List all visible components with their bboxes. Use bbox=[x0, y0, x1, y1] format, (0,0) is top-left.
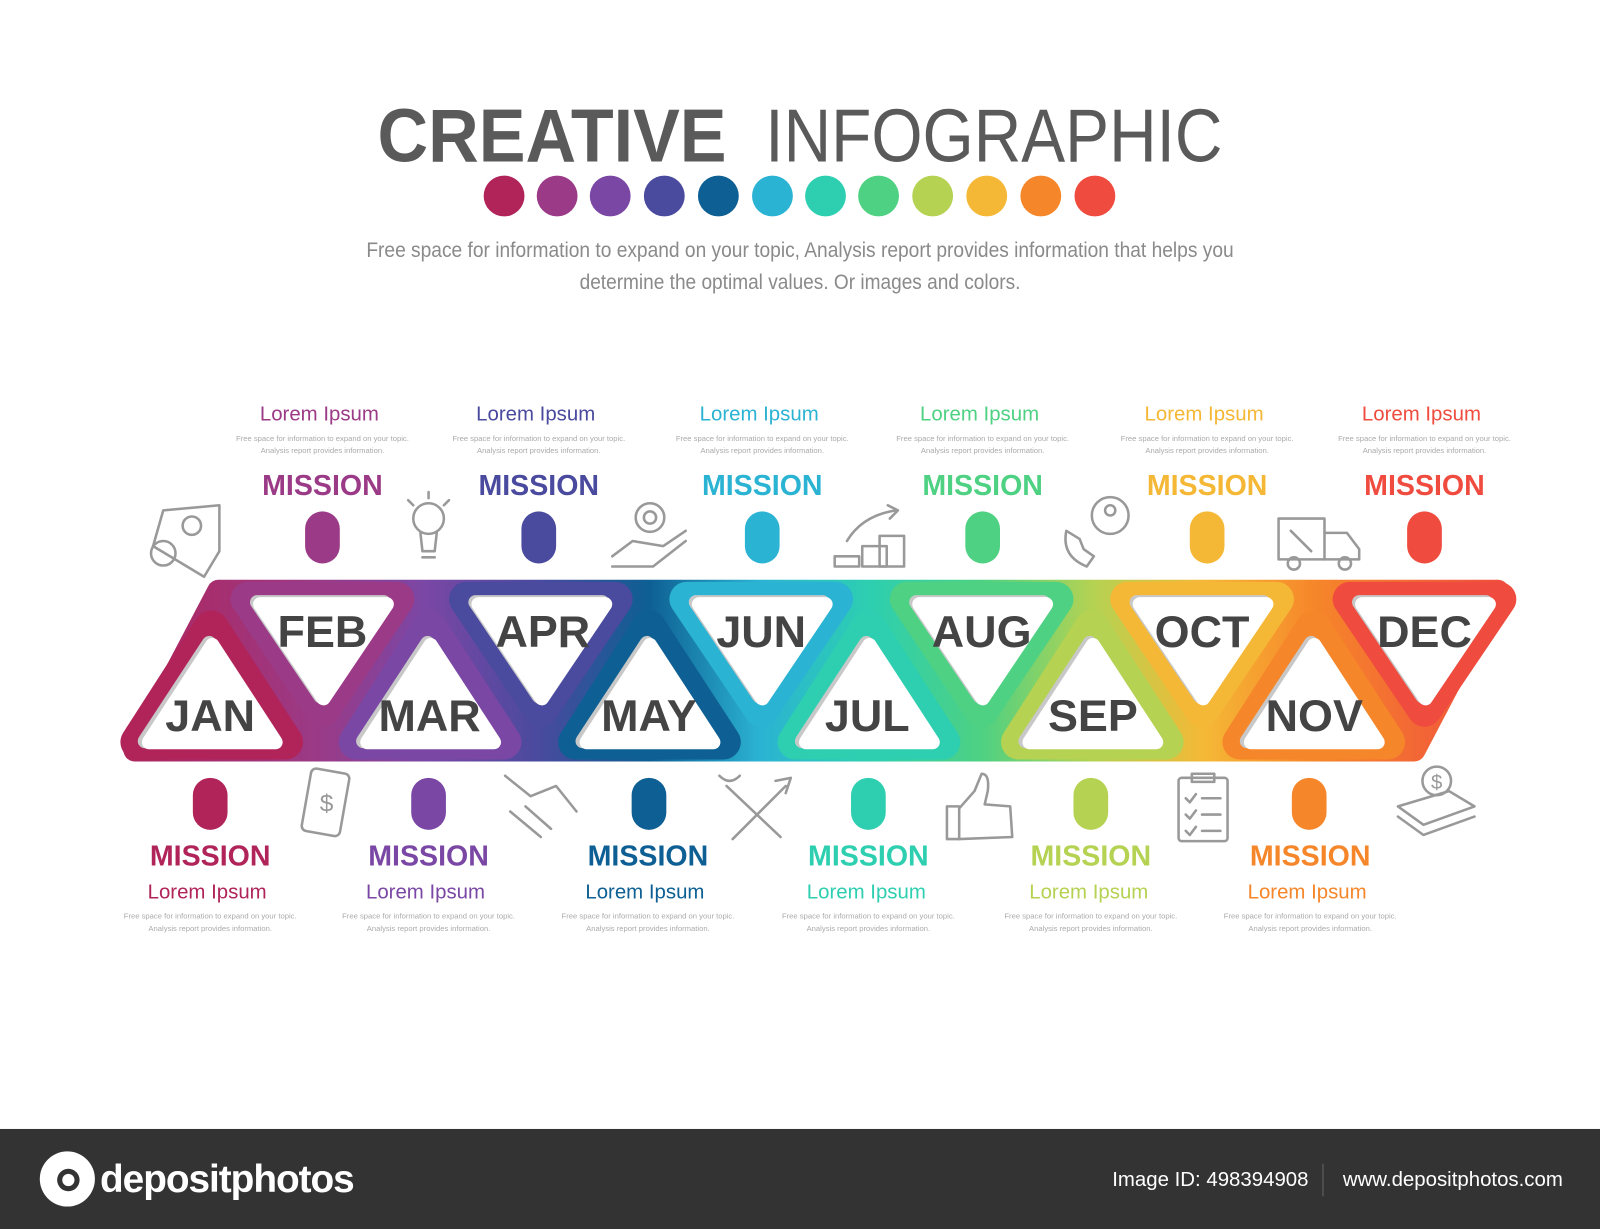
icon: checklist bbox=[1179, 774, 1228, 841]
footer: www.depositphotos.com bbox=[1342, 1169, 1563, 1191]
bottom missions: Lorem Ipsum bbox=[1029, 881, 1148, 903]
icon: coins growth bbox=[835, 505, 904, 567]
top missions: MISSION bbox=[478, 470, 599, 502]
bottom missions: Free space for information to expand on your topic. bbox=[342, 912, 515, 921]
top missions: Free space for information to expand on your topic. bbox=[236, 434, 409, 443]
icon: money stack: $ bbox=[1431, 772, 1443, 794]
month labels: JUN bbox=[716, 606, 806, 657]
top missions: MISSION bbox=[262, 470, 383, 502]
bottom missions: Analysis report provides information. bbox=[367, 924, 490, 933]
top missions: Lorem Ipsum bbox=[1145, 404, 1264, 426]
color dots bbox=[484, 176, 1115, 216]
month labels: APR bbox=[495, 606, 590, 657]
month labels: JUL bbox=[825, 690, 910, 741]
top missions: Analysis report provides information. bbox=[1363, 446, 1486, 455]
bottom missions: Lorem Ipsum bbox=[585, 881, 704, 903]
top missions: Analysis report provides information. bbox=[477, 446, 601, 455]
month labels: JAN bbox=[165, 690, 255, 741]
bottom missions: MISSION bbox=[1031, 841, 1151, 873]
top missions: Free space for information to expand on your topic. bbox=[676, 434, 849, 443]
month labels: OCT bbox=[1155, 606, 1249, 657]
icon: phone dollar bbox=[301, 768, 350, 837]
top missions: Lorem Ipsum bbox=[476, 404, 595, 426]
icons bbox=[151, 492, 1474, 841]
logo bbox=[40, 1151, 354, 1207]
month labels: AUG bbox=[932, 606, 1032, 657]
title: INFOGRAPHIC bbox=[765, 94, 1222, 178]
top missions: Free space for information to expand on your topic. bbox=[1121, 434, 1294, 443]
bottom missions: MISSION bbox=[150, 841, 271, 873]
top missions: Analysis report provides information. bbox=[1145, 446, 1269, 455]
month labels: MAR bbox=[378, 690, 481, 741]
bottom missions: Lorem Ipsum bbox=[366, 881, 485, 903]
top missions: Analysis report provides information. bbox=[261, 446, 384, 455]
footer bbox=[0, 1129, 1600, 1229]
month labels: SEP bbox=[1048, 690, 1138, 741]
top missions: MISSION bbox=[922, 470, 1043, 502]
bottom missions: MISSION bbox=[368, 841, 489, 873]
inner shadows bbox=[145, 602, 1486, 741]
icon: gear hand bbox=[612, 503, 686, 567]
top missions: Free space for information to expand on your topic. bbox=[1338, 434, 1511, 443]
footer: Image ID: 498394908 bbox=[1112, 1169, 1308, 1191]
month labels: MAY bbox=[601, 690, 697, 741]
bottom missions: Free space for information to expand on your topic. bbox=[782, 912, 955, 921]
top missions: MISSION bbox=[1364, 470, 1485, 502]
bottom missions: Free space for information to expand on your topic. bbox=[1004, 912, 1177, 921]
title bbox=[378, 94, 1222, 178]
bottom missions: Analysis report provides information. bbox=[148, 924, 272, 933]
icon: handshake bbox=[505, 776, 577, 837]
top missions: Lorem Ipsum bbox=[260, 404, 379, 426]
icon: thumbs up bbox=[947, 774, 1012, 839]
top missions: Analysis report provides information. bbox=[700, 446, 824, 455]
bottom missions: Analysis report provides information. bbox=[1248, 924, 1372, 933]
top missions: MISSION bbox=[1147, 470, 1267, 502]
month labels: NOV bbox=[1266, 690, 1363, 741]
bottom missions: MISSION bbox=[588, 841, 708, 873]
bottom missions: Free space for information to expand on your topic. bbox=[1224, 912, 1397, 921]
logo: depositphotos bbox=[100, 1158, 354, 1201]
title: CREATIVE bbox=[378, 94, 727, 178]
icon: tools bbox=[719, 776, 791, 839]
bottom missions: Lorem Ipsum bbox=[807, 881, 926, 903]
month labels bbox=[165, 606, 1472, 741]
timeline band bbox=[135, 591, 1499, 750]
month labels: FEB bbox=[278, 606, 367, 657]
bottom missions: Analysis report provides information. bbox=[807, 924, 930, 933]
bottom missions: Free space for information to expand on your topic. bbox=[124, 912, 297, 921]
icon: blueprint bbox=[151, 505, 219, 577]
top missions: Lorem Ipsum bbox=[920, 404, 1039, 426]
bottom missions: Lorem Ipsum bbox=[1248, 881, 1367, 903]
bottom missions: MISSION bbox=[1250, 841, 1371, 873]
bottom missions: Free space for information to expand on your topic. bbox=[562, 912, 734, 921]
bottom missions: Analysis report provides information. bbox=[1029, 924, 1153, 933]
top missions: MISSION bbox=[702, 470, 823, 502]
top missions: Lorem Ipsum bbox=[700, 404, 819, 426]
subtitle: determine the optimal values. Or images and colors. bbox=[580, 270, 1020, 294]
bottom missions bbox=[124, 778, 1397, 933]
bottom missions: MISSION bbox=[808, 841, 929, 873]
bottom missions: Analysis report provides information. bbox=[586, 924, 710, 933]
top missions: Free space for information to expand on your topic. bbox=[452, 434, 625, 443]
icon: phone support bbox=[1065, 497, 1129, 567]
top missions: Analysis report provides information. bbox=[921, 446, 1044, 455]
subtitle bbox=[366, 238, 1234, 294]
icon: bulb bbox=[408, 492, 449, 557]
month labels: DEC bbox=[1377, 606, 1472, 657]
icon: truck bbox=[1279, 519, 1359, 570]
top missions: Free space for information to expand on your topic. bbox=[896, 434, 1069, 443]
bottom missions: Lorem Ipsum bbox=[148, 881, 267, 903]
top missions bbox=[236, 404, 1511, 563]
subtitle: Free space for information to expand on your topic, Analysis report provides information that helps you bbox=[366, 238, 1234, 262]
icon: phone dollar: $ bbox=[320, 791, 334, 818]
icon: money stack bbox=[1398, 767, 1474, 835]
month rings bbox=[138, 599, 1499, 742]
top missions: Lorem Ipsum bbox=[1362, 404, 1481, 426]
